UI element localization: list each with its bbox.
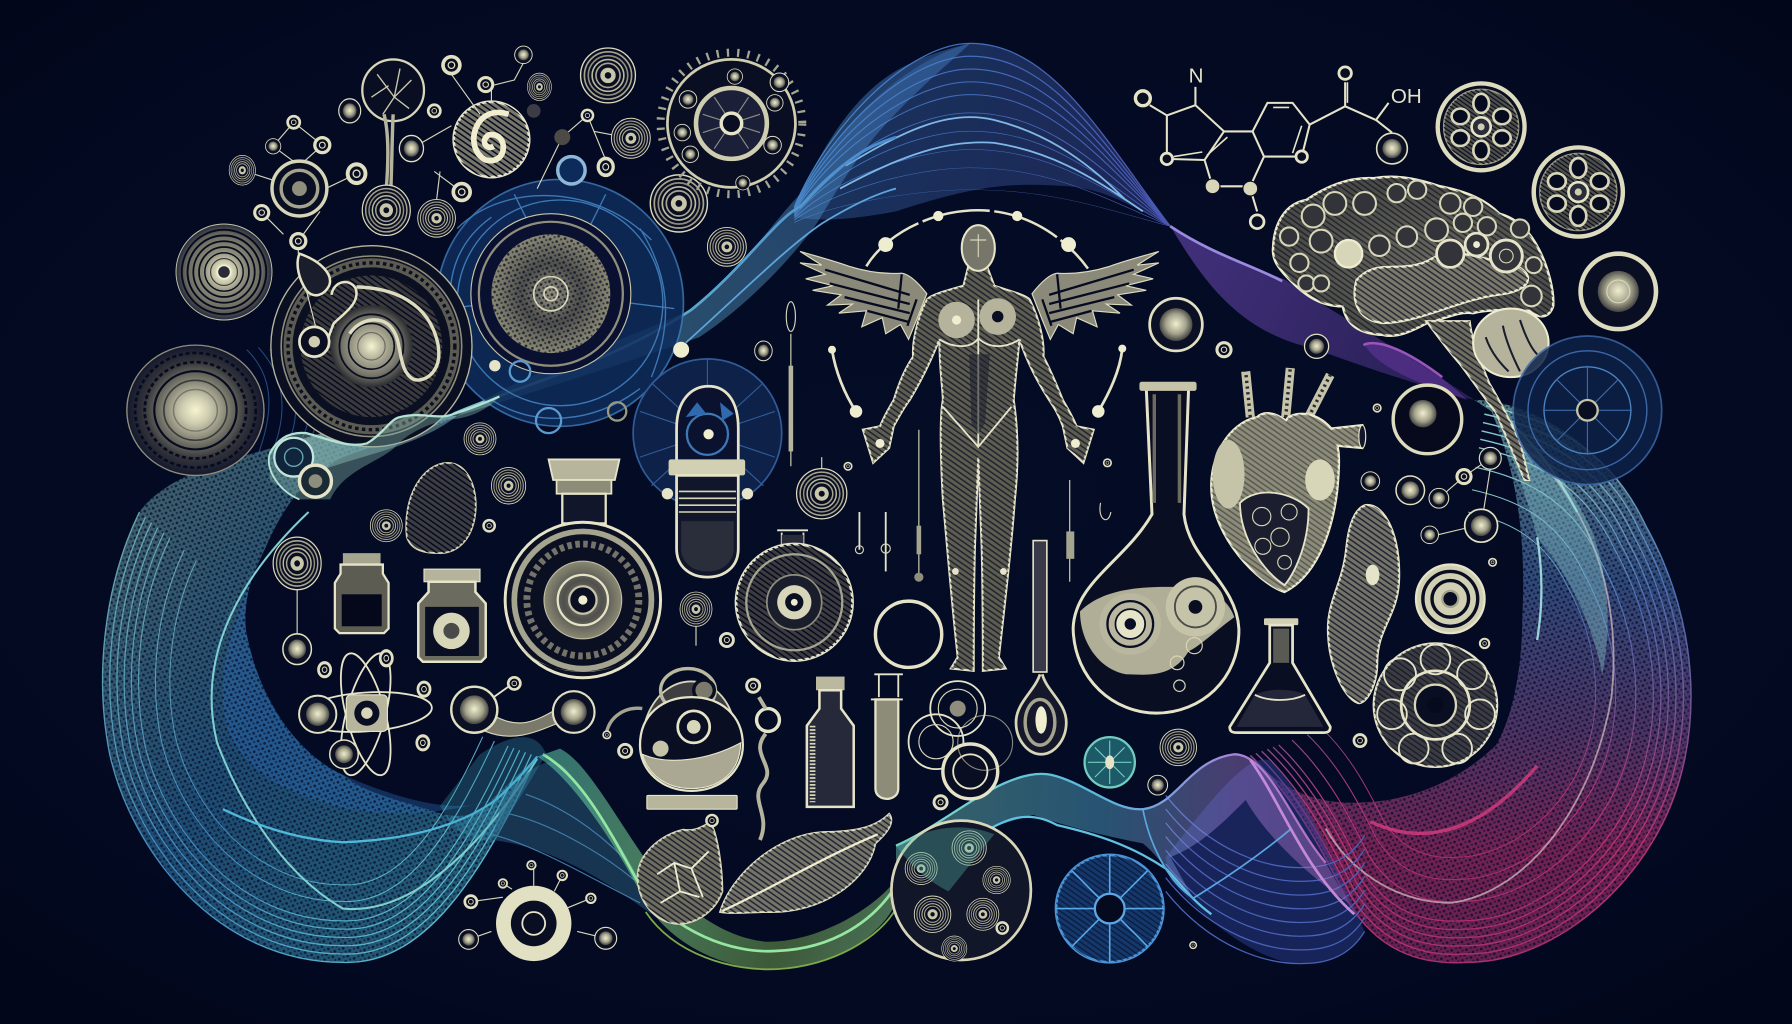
disc: target rings top (581, 48, 635, 103)
molecule network: node K and satellites (229, 115, 367, 254)
ribbon: teal to lilac wave (896, 754, 1354, 914)
brain stem and cerebellum (1426, 309, 1549, 480)
brain (1273, 177, 1553, 336)
ribbon: rising band to crest (299, 43, 970, 480)
small cell cluster (370, 463, 526, 553)
right wing (1032, 251, 1159, 339)
ribbon: blue crest (794, 43, 1170, 226)
panel: bottom specimens (459, 729, 1197, 962)
test tube and magnifier (871, 601, 942, 799)
disc: small pearl (707, 227, 746, 266)
ribbon strand crossing the spiral disc (269, 397, 499, 499)
wheel cell upper (1438, 83, 1525, 170)
large cell (1374, 643, 1497, 767)
disc: small rings (464, 423, 496, 455)
arc right (1092, 345, 1126, 418)
blue faint disc (1513, 336, 1662, 485)
panel: centre-left lab glassware (273, 302, 1111, 840)
ribbon: dark blue trough (1166, 760, 1365, 964)
blue cell disc (1056, 855, 1163, 962)
coiled ring stem (757, 697, 779, 840)
ribbon: purple tail (1170, 226, 1474, 400)
wheel cell lower (1534, 147, 1623, 237)
halo arc with beads (866, 210, 1088, 269)
overlapping rings (909, 681, 1013, 810)
left wing (800, 251, 927, 339)
small dots right (1353, 638, 1490, 748)
label: OH: OH (1391, 85, 1422, 108)
disc: target rings middle (650, 175, 707, 232)
teal diatom (1085, 737, 1135, 787)
disc with pendant (273, 537, 321, 665)
panel: top-left discs (127, 46, 802, 499)
disc: blue cell outer (437, 157, 683, 433)
small spheres near wing (1103, 298, 1329, 467)
arc left (828, 346, 862, 418)
heart (1211, 368, 1366, 592)
molecule network: upper satellites (339, 46, 650, 237)
needle instruments (786, 302, 1111, 582)
patterned round flask (736, 530, 853, 661)
small beads (1148, 729, 1197, 949)
disc: glowing contour rings (127, 345, 264, 475)
dots on ribbon (673, 341, 772, 361)
spiral ring disc (1416, 565, 1485, 633)
erlenmeyer flask (1230, 618, 1330, 733)
atom (298, 649, 433, 780)
large vesicle cell (891, 821, 1031, 961)
round bottom flask with liquid (1073, 382, 1239, 713)
black sphere (1393, 385, 1462, 454)
medium jar (418, 569, 486, 662)
ribbon: right C band (1250, 400, 1691, 963)
chemical structure (1135, 64, 1422, 229)
label: N: N (1189, 64, 1203, 87)
disc: spiral cell (454, 102, 529, 177)
ribbon: green band (440, 737, 896, 969)
disc: contour rings upper (176, 224, 272, 320)
ribbon: dark lower-left wave (491, 762, 651, 914)
ringed sphere (1581, 254, 1656, 329)
tall bottle (807, 677, 854, 807)
ribbon: left C band (103, 415, 537, 962)
disc: spiked cog (661, 53, 802, 194)
panel: winged human figure (800, 210, 1159, 754)
satellite cell (459, 860, 617, 961)
slipper organism (1328, 505, 1399, 703)
disc: veined sphere on stem (362, 59, 424, 235)
distillation bowl (602, 669, 743, 809)
panel: right glassware and organs (1073, 64, 1662, 767)
cell cluster right (1361, 403, 1501, 567)
pendant rings (680, 592, 761, 694)
long thermometer (1016, 541, 1066, 754)
seed (638, 814, 722, 924)
ribbon: faint fan behind glowing disc (247, 347, 317, 457)
dumbbell molecule (451, 676, 595, 736)
leaf (720, 814, 891, 913)
round corked jar (505, 459, 661, 678)
tube in blue cell (633, 359, 782, 577)
disc: large spiral (271, 246, 472, 447)
body (863, 225, 1094, 671)
small vial (335, 553, 389, 633)
